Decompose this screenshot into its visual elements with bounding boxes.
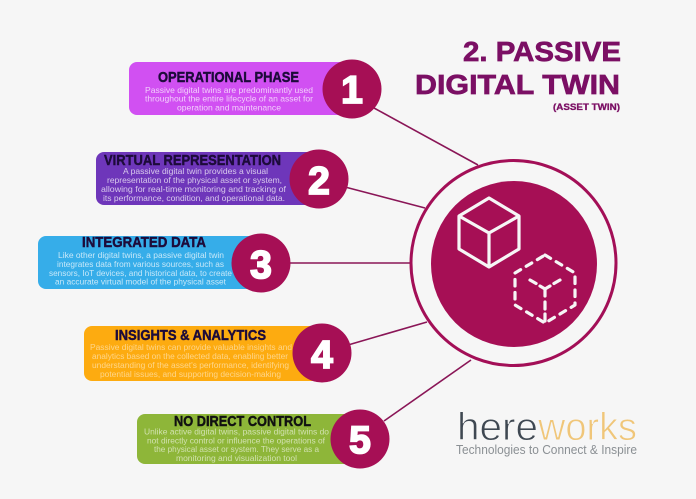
panel: no direct control: Unlike active digital twins, passive digital twins do: [144, 426, 329, 436]
logo: hereworks: here: [457, 406, 538, 449]
title: 2. PASSIVE: [463, 36, 621, 67]
panel: no direct control: monitoring and visualization tool: [176, 453, 297, 463]
number badge 2: 2: [308, 160, 330, 203]
panel: virtual representation: its performance, condition, and operational data.: [103, 193, 285, 203]
logo: hereworks: works: [537, 406, 637, 449]
number badge 1: [322, 60, 382, 118]
icon: dashed cube: [515, 255, 575, 323]
number badge 4: [292, 324, 352, 382]
panel: insights and analytics: Passive digital twins can provide valuable insights and: [90, 342, 292, 352]
panel: operational phase: throughout the entire lifecycle of an asset for: [145, 94, 313, 104]
panel: operational phase: Passive digital twins are predominantly used: [145, 85, 313, 95]
panel: virtual representation: representation of the physical asset or system,: [107, 175, 282, 185]
panel: no direct control: [137, 414, 362, 464]
panel: insights and analytics: analytics based on the collected data, enabling better: [92, 351, 288, 361]
panel: virtual representation: allowing for real-time monitoring and tracking of: [101, 184, 287, 194]
number badge 5: [330, 410, 390, 468]
panel: no direct control: the physical asset or system. They serve as a: [154, 444, 319, 454]
title: DIGITAL TWIN: [415, 69, 620, 100]
title: [415, 36, 621, 112]
central circle: [411, 160, 616, 366]
icon: solid cube: [459, 198, 519, 267]
number badge 1: 1: [341, 69, 363, 112]
panel: integrated data: sensors, IoT devices, and historical data, to create: [49, 268, 232, 278]
panel: operational phase: [129, 62, 354, 115]
number badge 5: 5: [349, 419, 371, 462]
title: (ASSET TWIN): [553, 102, 620, 112]
panel: integrated data: INTEGRATED DATA: [82, 235, 206, 251]
panel: insights and analytics: understanding of the asset's performance, identifying: [92, 360, 289, 370]
panel: integrated data: integrates data from various sources, such as: [57, 259, 224, 269]
connector lines: [288, 108, 478, 421]
number badge 2: [290, 150, 348, 208]
panel: virtual representation: VIRTUAL REPRESENTATION: [104, 153, 281, 169]
panel: integrated data: Like other digital twins, a passive digital twin: [58, 250, 224, 260]
panel: operational phase: operation and maintenance: [177, 102, 281, 112]
panel: no direct control: NO DIRECT CONTROL: [174, 414, 311, 430]
panel: insights and analytics: INSIGHTS & ANALYTICS: [115, 328, 266, 344]
panel: insights and analytics: [84, 326, 324, 381]
logo: hereworks: Technologies to Connect & Inspire: [456, 443, 637, 457]
panel: operational phase: OPERATIONAL PHASE: [158, 70, 299, 86]
panel: virtual representation: A passive digital twin provides a visual: [123, 166, 268, 176]
panel: insights and analytics: potential issues, and supporting decision-making: [100, 369, 281, 379]
panel: integrated data: [38, 235, 263, 289]
number badge 3: [232, 234, 290, 292]
logo: hereworks: [456, 406, 637, 457]
number badge 4: 4: [311, 334, 333, 377]
panel: virtual representation: [96, 152, 321, 205]
panel: integrated data: an accurate virtual model of the physical asset: [55, 276, 227, 286]
number badge 3: 3: [250, 244, 272, 287]
panel: no direct control: not directly control or influence the operations of: [147, 436, 326, 446]
